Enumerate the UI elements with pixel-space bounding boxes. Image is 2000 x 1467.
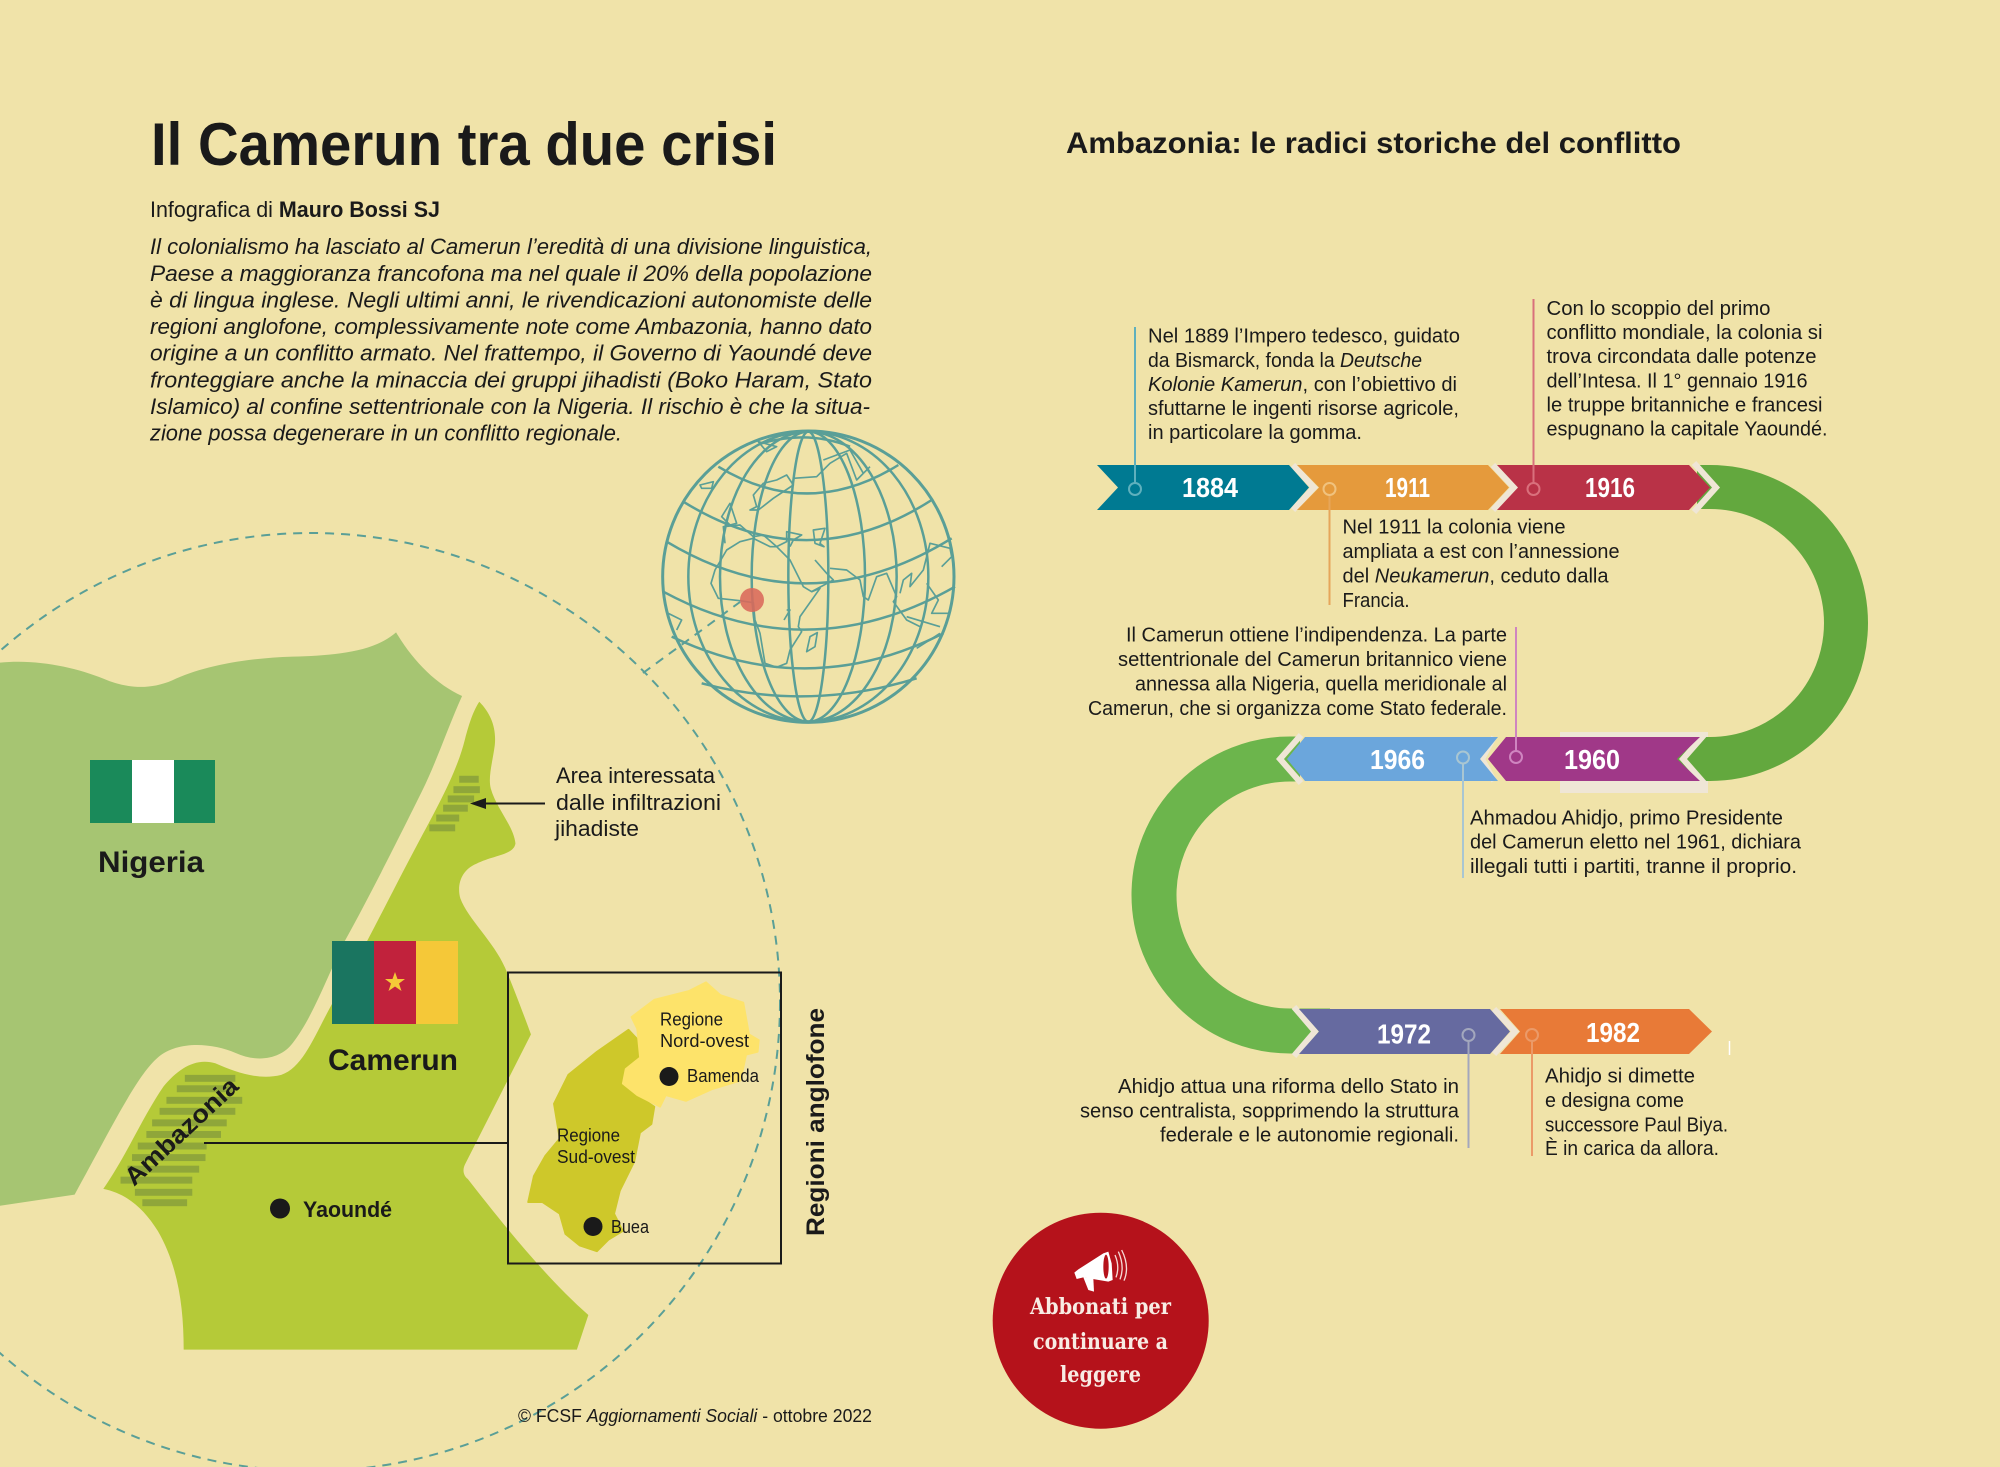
byline: Infografica di Mauro Bossi SJ [150,197,440,222]
timeline bar: 1966 [1287,737,1498,781]
marker: 1960 [1510,627,1522,763]
map: Regione Nord-ovest [623,982,759,1107]
text block: 1911: ampliata a est con l’annessione [1342,541,1620,563]
badge: subscribe [993,1213,1209,1429]
callout: Area interessata: dalle infiltrazioni [556,790,721,815]
timeline bar: 1911: 1911 [1385,472,1430,503]
text block: 1916: dell’Intesa. Il 1° gennaio 1916 [1546,370,1808,392]
text block: 1966: illegali tutti i partiti, tranne il proprio. [1470,856,1797,878]
map: Ambazonia hatching [121,1075,242,1206]
marker: Camerun on globe [740,588,764,612]
text block: 1911: Nel 1911 la colonia viene [1342,516,1566,538]
flag: Camerun [332,941,458,1024]
marker: 1916 [1528,299,1540,495]
copyright: © FCSF Aggiornamenti Sociali - ottobre 2022 [518,1406,872,1426]
callout: Area interessata [554,763,721,841]
label: Regione Sud-ovest [557,1126,635,1167]
text block: 1966: del Camerun eletto nel 1961, dichiara [1470,832,1802,854]
timeline bar: 1916: 1916 [1585,472,1635,503]
Europe coast [723,525,802,547]
text block: 1960 [1088,624,1507,720]
text block: 1960: Il Camerun ottiene l’indipendenza. La parte [1126,624,1507,646]
label: Regione Nord-ovest: Nord-ovest [660,1031,749,1051]
dashed link: globe to map [643,602,740,673]
map [0,632,759,1350]
text block: 1972: senso centralista, sopprimendo la struttura [1080,1100,1460,1122]
label: Ambazonia: Ambazonia [119,1071,245,1191]
islands [807,633,817,652]
timeline bar: 1916 [1497,465,1710,510]
text block: introduction: regioni anglofone, complessivamente note come Ambazonia, hanno dato [150,314,872,339]
text block: 1911: del Neukamerun, ceduto dalla [1342,566,1609,588]
text block: 1966: Ahmadou Ahidjo, primo Presidente [1470,808,1783,830]
label: Nigeria: Nigeria [98,846,204,879]
text block: 1916: trova circondata dalle potenze [1546,346,1816,368]
text block: 1960: annessa alla Nigeria, quella meridionale al [1135,674,1507,696]
timeline connector: lower arc [1154,759,1330,1031]
map: jihadist area hatching [429,776,480,831]
map: Nigeria territory [0,632,462,1206]
badge text [1029,1294,1171,1388]
city: Bamenda: Bamenda [687,1066,760,1086]
callout: Area interessata: jihadiste [554,816,639,841]
text block: 1982: successore Paul Biya. [1545,1114,1728,1136]
timeline separators [1280,463,1716,1056]
text block: introduction: Paese a maggioranza francofona ma nel quale il 20% della popolazione [150,261,872,286]
text block: 1916: Con lo scoppio del primo [1546,298,1770,320]
badge text: leggere [1060,1362,1141,1388]
inset frame: regioni anglofone [508,972,781,1264]
timeline bar: 1960 [1488,737,1700,781]
text block: 1960: settentrionale del Camerun britannico viene [1118,649,1507,671]
text block: introduction: origine a un conflitto armato. Nel frattempo, il Governo di Yaoundé deve [150,340,872,366]
Arabia and Asia south coast [812,560,833,592]
icon: megaphone [1074,1250,1127,1292]
text block: introduction [149,234,872,446]
text block: 1982 [1545,1066,1728,1160]
text block: 1972 [1080,1076,1460,1146]
timeline bar: 1966: 1966 [1370,744,1425,775]
arrow: jihadist area [470,798,545,809]
icon: globe [663,431,955,722]
dashed locator circle [0,533,780,1467]
city: Bamenda [660,1066,760,1086]
text block: 1884: in particolare la gomma. [1148,422,1362,444]
text block: introduction: Islamico) al confine settentrionale con la Nigeria. Il rischio è che la situa- [150,394,870,419]
timeline bar: 1960: 1960 [1564,744,1620,775]
text block: 1916: le truppe britanniche e francesi [1546,394,1822,416]
city: Buea: Buea [611,1217,650,1237]
text block: introduction: fronteggiare anche la minaccia dei gruppi jihadisti (Boko Haram, Stato [150,368,872,392]
text block: 1884: da Bismarck, fonda la Deutsche [1148,350,1422,372]
text block: 1966 [1470,808,1802,878]
text block: 1916 [1546,298,1828,440]
text block: 1982: e designa come [1545,1090,1684,1112]
Caspian [813,528,825,547]
timeline bar: 1982 [1500,1009,1712,1054]
timeline bar: 1884 [1097,465,1309,510]
text block: 1916: espugnano la capitale Yaoundé. [1546,418,1828,440]
marker: 1966 [1457,752,1469,878]
flag: Nigeria [90,760,215,823]
text block: 1916: conflitto mondiale, la colonia si [1546,322,1822,344]
title: Il Camerun tra due crisi [151,111,777,178]
label: Regione Nord-ovest [660,1010,749,1051]
text block: 1884: Kolonie Kamerun, con l’obiettivo di [1148,374,1457,396]
badge text: continuare a [1033,1329,1168,1355]
text block: 1972: Ahidjo attua una riforma dello Stato in [1118,1076,1459,1098]
marker: 1911 [1324,483,1336,605]
text block: 1884: sfuttarne le ingenti risorse agricole, [1148,398,1459,420]
text block: 1960: Camerun, che si organizza come Stato federale. [1088,698,1507,720]
text block: introduction: è di lingua inglese. Negli ultimi anni, le rivendicazioni autonomiste delle [150,288,872,312]
text block: 1982: È in carica da allora. [1545,1137,1719,1160]
tick mark [1728,1041,1730,1055]
text block: 1911: Francia. [1342,590,1410,612]
city: Buea [584,1217,650,1237]
text block: 1884 [1148,326,1460,444]
label: Regione Nord-ovest: Regione [660,1010,723,1030]
map: Regione Sud-ovest [528,1030,654,1251]
label: Regione Sud-ovest: Sud-ovest [557,1147,635,1167]
label: Regione Sud-ovest: Regione [557,1126,620,1146]
badge text: Abbonati per [1029,1294,1171,1320]
timeline bar: 1884: 1884 [1182,472,1238,503]
Africa [711,538,820,667]
text block: 1982: Ahidjo si dimette [1545,1066,1695,1088]
label: Regioni anglofone: Regioni anglofone [802,1008,830,1236]
marker: 1982 [1526,1029,1538,1156]
city: Yaoundé: Yaoundé [303,1197,392,1222]
text block: 1884: Nel 1889 l’Impero tedesco, guidato [1148,326,1460,348]
timeline connector: upper arc [1670,487,1846,759]
backing patch: 1960 [1560,732,1708,793]
timeline bar: 1972: 1972 [1377,1018,1431,1050]
marker: 1972 [1462,1029,1474,1148]
Arctic coast [793,453,870,480]
heading: timeline: Ambazonia: le radici storiche del conflitto [1066,127,1681,160]
marker: 1884 [1129,327,1141,495]
map: Camerun territory [103,702,588,1350]
text block: 1911 [1342,516,1620,612]
text block: 1972: federale e le autonomie regionali. [1160,1124,1459,1146]
text block: introduction: Il colonialismo ha lasciato al Camerun l’eredità di una divisione linguistica, [150,234,872,259]
text block: introduction: zione possa degenerare in un conflitto regionale. [149,420,622,446]
timeline bar: 1982: 1982 [1586,1017,1640,1048]
leader line: Ambazonia to inset [204,1142,508,1144]
timeline bar: 1911 [1297,465,1509,510]
timeline bar: 1972 [1299,1009,1510,1054]
label: Camerun: Camerun [328,1044,458,1077]
callout: Area interessata: Area interessata [556,763,716,788]
